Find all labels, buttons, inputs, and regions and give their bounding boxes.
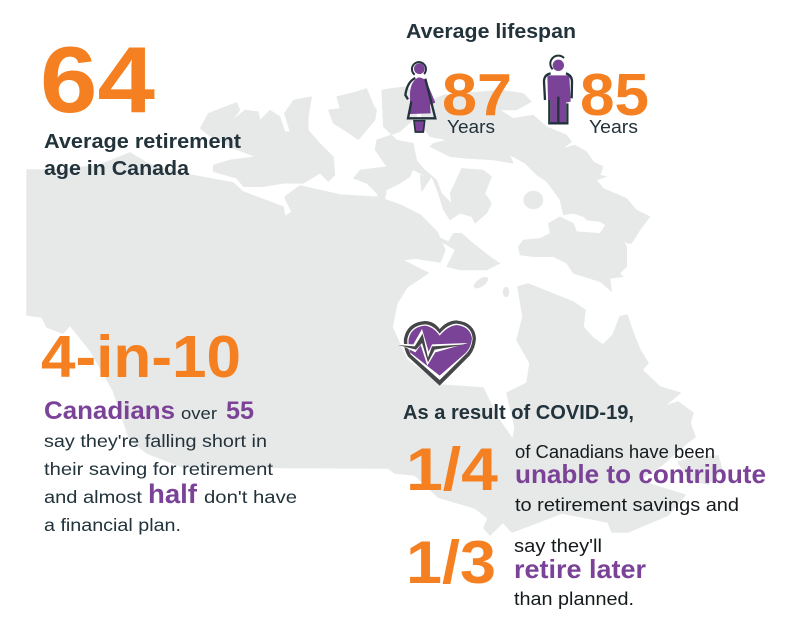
stat: 4-in-10 Canadians: a financial plan. — [44, 515, 181, 535]
stat: 1/4 unable to contribute — [406, 436, 766, 515]
stat: 1/4 unable to contribute: to retirement savings and — [515, 495, 739, 515]
stat: 4-in-10 Canadians — [41, 324, 297, 535]
stat: 1/3 retire later: retire later — [514, 554, 646, 584]
stat: 64 average retirement age: Average retirement — [44, 130, 241, 153]
stat: 4-in-10 Canadians: 55 — [226, 397, 254, 425]
stat: 4-in-10 Canadians: and almost — [44, 487, 142, 507]
stat: women 87 years: Years — [447, 117, 495, 137]
stat: 1/4 unable to contribute: 1/4 — [406, 436, 499, 503]
stat: 1/4 unable to contribute: of Canadians have been — [515, 442, 715, 462]
stat: 4-in-10 Canadians: over — [181, 404, 217, 423]
stat: 4-in-10 Canadians: their saving for retirement — [44, 459, 273, 479]
map of Canada background — [27, 87, 722, 535]
stat: 1/4 unable to contribute: unable to contribute — [515, 459, 766, 489]
stat: 4-in-10 Canadians: don't have — [204, 487, 297, 507]
stat: 1/3 retire later: say they'll — [514, 536, 602, 556]
stat: 1/3 retire later: 1/3 — [406, 529, 496, 596]
stat: 1/3 retire later: than planned. — [514, 589, 634, 609]
stat: 64 average retirement age: 64 — [40, 27, 155, 132]
stat: 4-in-10 Canadians: 4-in-10 — [41, 324, 241, 390]
stat: 64 average retirement age: age in Canada — [44, 157, 190, 180]
heading: as a result of COVID-19: As a result of COVID-19, — [403, 402, 634, 424]
stat: 64 average retirement age — [40, 27, 241, 180]
icon: woman — [405, 62, 435, 132]
stat: women 87 years: 87 — [442, 62, 512, 128]
stat: 4-in-10 Canadians: Canadians — [44, 397, 175, 425]
stat: men 85 years: 85 — [580, 62, 649, 128]
heading: average lifespan: Average lifespan — [406, 21, 576, 43]
stat: 1/3 retire later — [406, 529, 646, 609]
stat: men 85 years: Years — [589, 117, 638, 137]
icon: heart with pulse line — [398, 320, 476, 386]
stat: 4-in-10 Canadians: half — [148, 479, 198, 509]
stat: 4-in-10 Canadians: say they're falling short in — [44, 431, 267, 451]
icon: man — [544, 56, 572, 123]
